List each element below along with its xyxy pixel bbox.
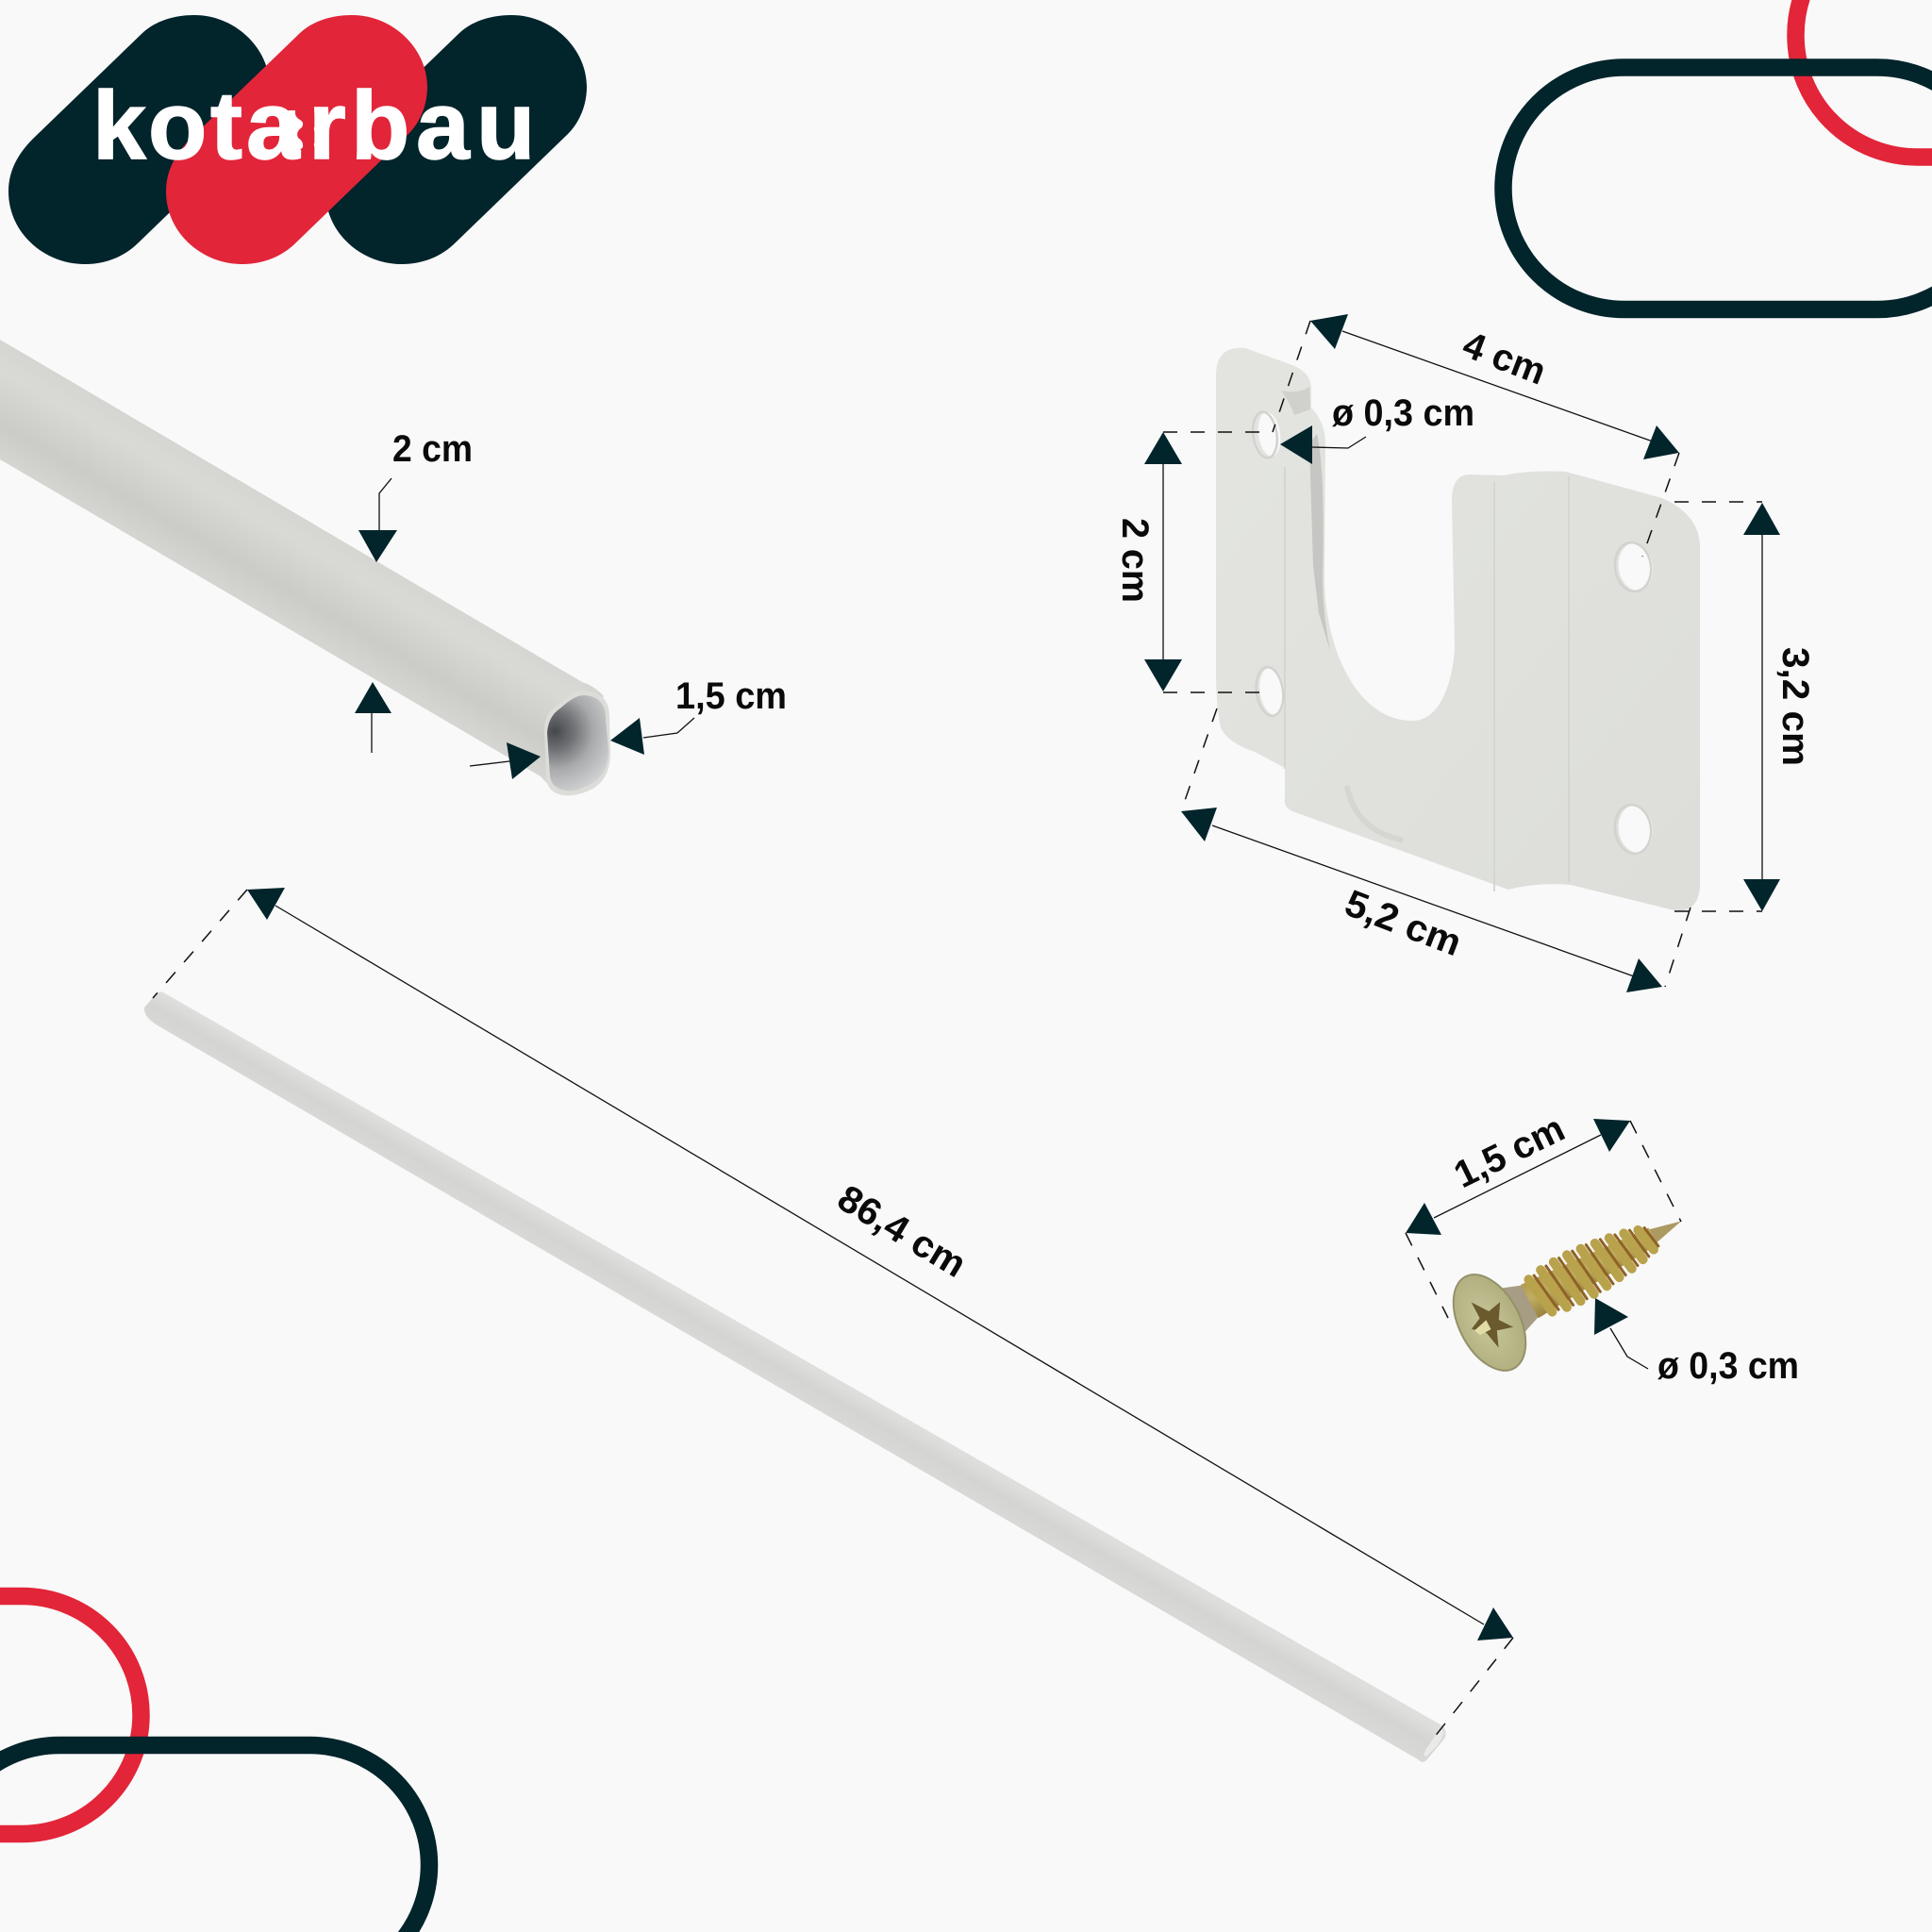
dimension: tube 1,5 cm [470, 675, 787, 779]
arrowhead [1743, 503, 1780, 535]
arrowhead [1310, 314, 1348, 349]
dimension: screw 1,5 cm [1406, 1108, 1681, 1318]
screw tip [1645, 1213, 1685, 1245]
arrowhead [1593, 1119, 1630, 1152]
arrowhead [1626, 958, 1662, 992]
arrowhead [1144, 432, 1182, 464]
arrowhead top [358, 530, 397, 562]
screw recess [1460, 1291, 1519, 1355]
logo dark pill left [8, 15, 270, 264]
label 4 cm: 4 cm [1457, 324, 1552, 393]
arrowhead [1280, 425, 1312, 464]
label ø 0,3 cm: ø 0,3 cm [1332, 392, 1474, 434]
decoration: bottom left outlines [0, 1596, 429, 1932]
arrowhead end [1477, 1607, 1513, 1641]
decoration: top right outlines [1504, 0, 1932, 309]
label 86,4 cm: 86,4 cm [830, 1177, 974, 1286]
label 3,2 cm: 3,2 cm [1774, 647, 1816, 766]
bracket hole rims [1250, 410, 1654, 856]
logo wordmark: kotarbau [92, 72, 535, 179]
dimension: bracket hole ø 0,3 cm [1280, 392, 1474, 464]
long tube [144, 991, 1446, 1762]
arrowhead [1643, 425, 1679, 459]
arrowhead [1406, 1203, 1441, 1235]
bracket inner fold [1281, 387, 1310, 415]
tube rim [544, 691, 610, 795]
screw threads [1526, 1214, 1664, 1319]
dimension: screw ø 0,3 cm [1594, 1298, 1799, 1387]
screw head [1439, 1262, 1541, 1383]
arrowhead [1181, 808, 1217, 841]
dimension: tube 2 cm [355, 428, 473, 753]
dimension: bracket 2 cm [1114, 432, 1273, 692]
arrowhead left [507, 742, 541, 779]
bracket [1216, 348, 1700, 910]
label 5,2 cm: 5,2 cm [1340, 882, 1467, 964]
dimension: bracket 3,2 cm [1674, 502, 1816, 911]
bracket embossed mark [1347, 788, 1401, 840]
label ø 0,3 cm: ø 0,3 cm [1657, 1345, 1799, 1387]
tube body [0, 340, 604, 795]
logo dark pill right [325, 15, 587, 264]
screw neck [1483, 1272, 1549, 1345]
logo: kotarbau [8, 15, 587, 264]
logo gear teeth on r [314, 110, 328, 158]
dimension: bracket 4 cm [1273, 314, 1679, 557]
arrowhead [1594, 1298, 1628, 1335]
arrowhead right [610, 718, 644, 755]
long tube body [144, 991, 1446, 1762]
screw shank [1521, 1220, 1662, 1318]
arrowhead bottom [355, 682, 391, 713]
long tube end opening [1424, 1730, 1443, 1757]
screw recess highlight [1473, 1320, 1491, 1337]
label 2 cm: 2 cm [1114, 518, 1156, 603]
label 2 cm: 2 cm [392, 428, 473, 470]
arrowhead [1144, 659, 1182, 691]
tube opening [547, 695, 608, 791]
arrowhead [1743, 879, 1780, 911]
bracket flange edge [1309, 434, 1330, 651]
label 1,5 cm: 1,5 cm [1448, 1108, 1571, 1196]
arrowhead start [247, 888, 285, 920]
logo gear teeth on a [289, 110, 303, 158]
bracket fold lines [1285, 467, 1569, 891]
bracket plate [1216, 348, 1700, 910]
logo red pill [166, 15, 427, 264]
screw [1439, 1175, 1706, 1383]
dimension: bracket 5,2 cm [1181, 708, 1690, 992]
dimension: long tube 86,4 cm [153, 888, 1513, 1738]
label 1,5 cm: 1,5 cm [675, 675, 787, 717]
close-up tube with cross section [0, 340, 610, 795]
